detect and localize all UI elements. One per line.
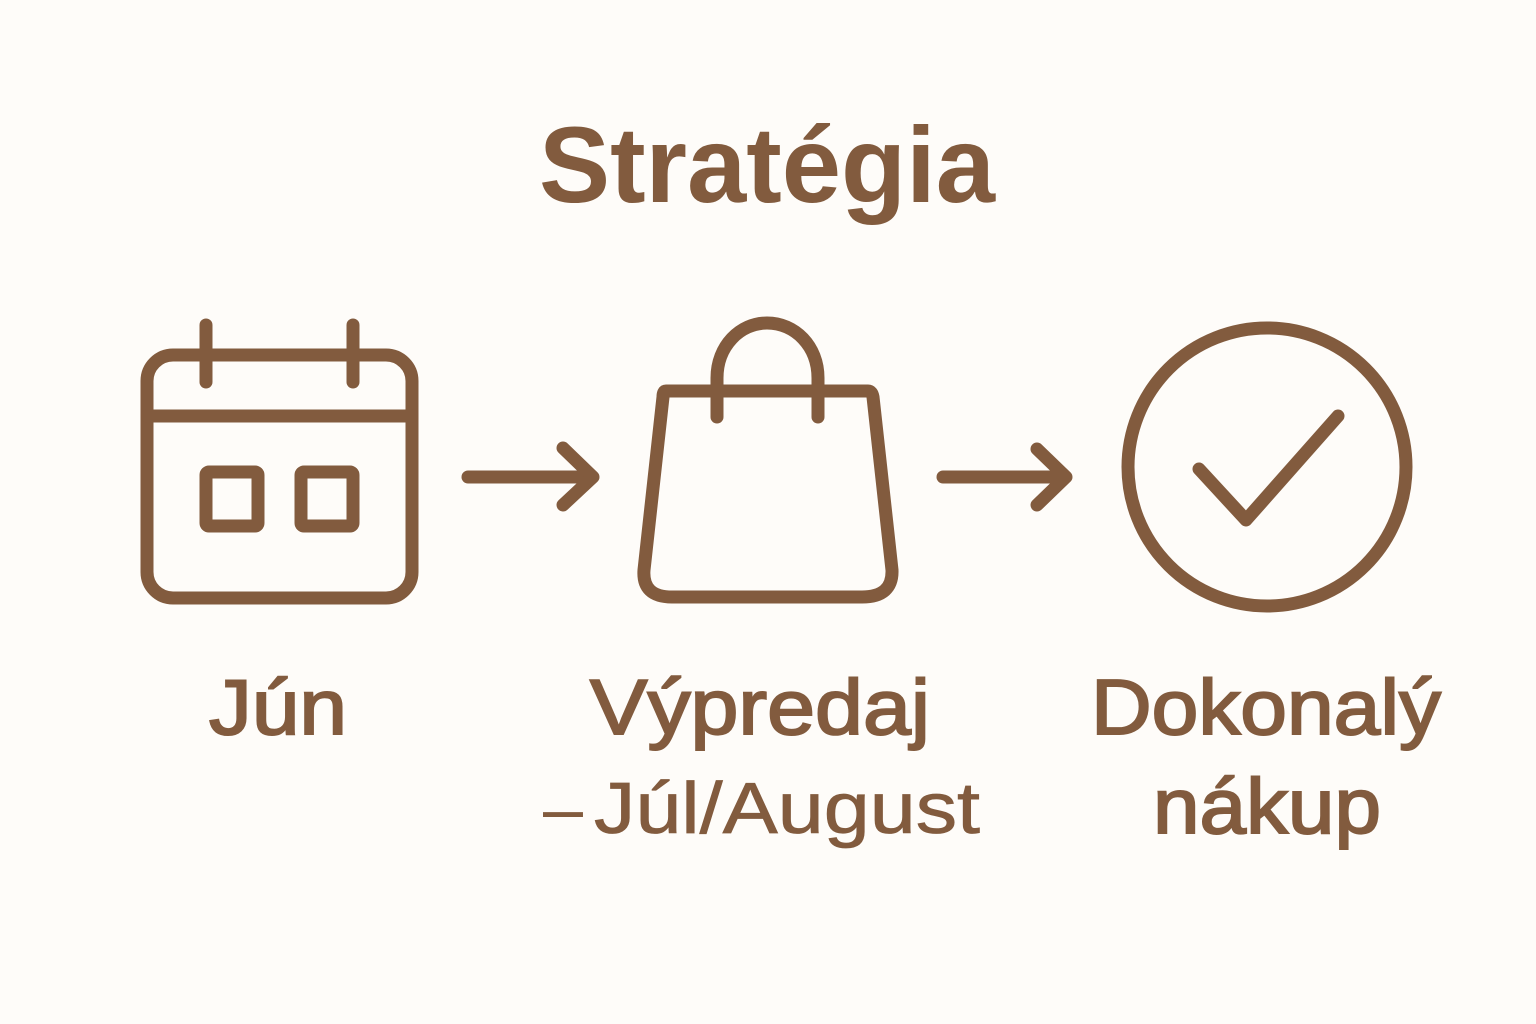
label: Dokonalý nákup: Dokonalý <box>1091 663 1441 751</box>
label: Výpredaj – Júl/August <box>543 663 980 849</box>
label: Jún: Jún <box>209 663 347 751</box>
icon: check circle <box>1128 328 1406 606</box>
label: Dokonalý nákup: nákup <box>1153 762 1381 850</box>
icon: shopping bag <box>644 323 892 597</box>
label: Výpredaj – Júl/August: Júl/August <box>594 769 980 849</box>
label: Výpredaj – Júl/August: – <box>543 769 584 849</box>
label: Výpredaj – Júl/August: Výpredaj <box>590 663 930 751</box>
icon: calendar <box>147 325 412 598</box>
title: Stratégia <box>539 104 996 225</box>
arrow: calendar to bag <box>468 448 593 505</box>
arrow: bag to check <box>943 449 1066 505</box>
label: Dokonalý nákup <box>1091 663 1441 850</box>
